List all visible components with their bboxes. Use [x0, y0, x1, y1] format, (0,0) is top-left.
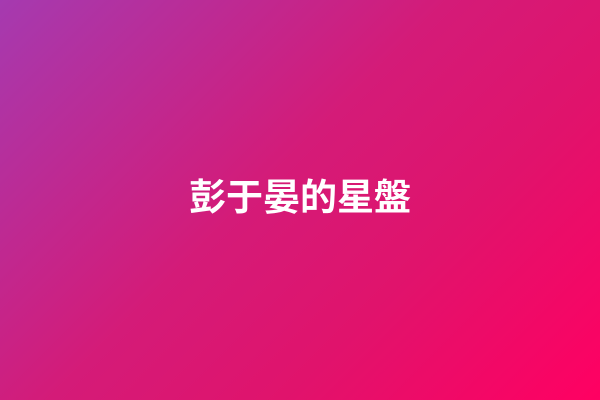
title: 彭于晏的星盤 — [189, 177, 411, 218]
